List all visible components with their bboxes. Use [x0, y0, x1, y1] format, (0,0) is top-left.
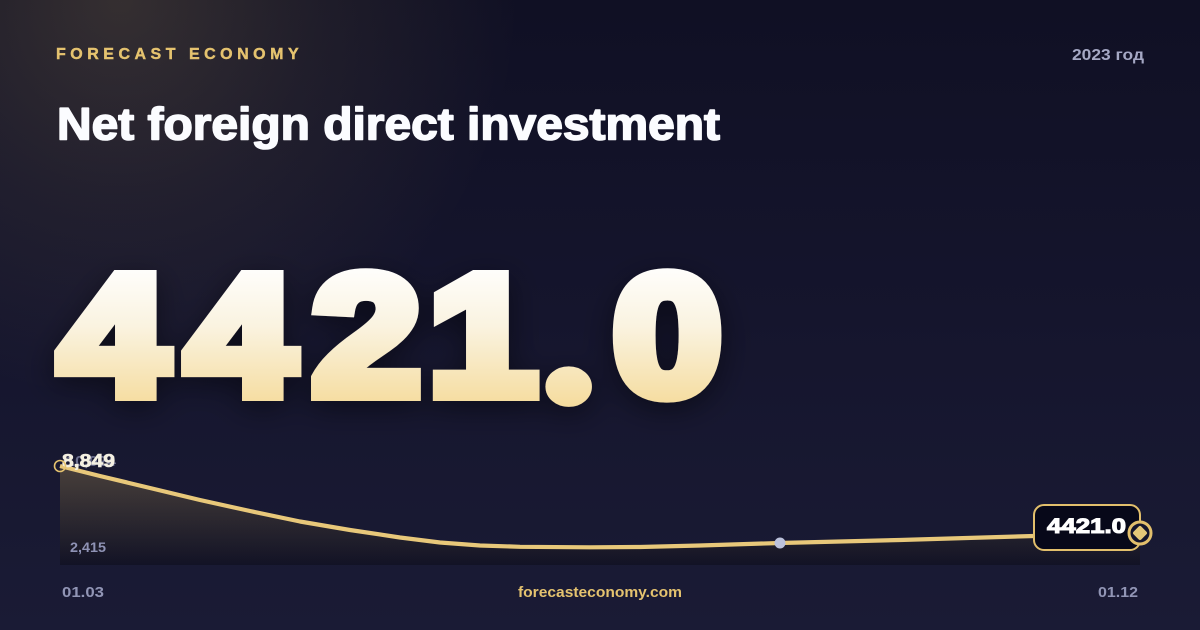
- chart line: [60, 466, 1140, 547]
- line chart: [54, 451, 1151, 565]
- main value: 0: [613, 240, 721, 430]
- end point marker: [1129, 522, 1151, 544]
- min value label: 2,415: [70, 539, 106, 555]
- main value: 4: [59, 240, 167, 430]
- end date label: 01.12: [1098, 584, 1138, 601]
- main value: .: [544, 246, 593, 435]
- start point marker: [54, 460, 66, 472]
- main value: 1: [429, 240, 537, 430]
- site url: forecasteconomy.com: [518, 585, 682, 601]
- brand label: FORECAST ECONOMY: [56, 46, 303, 63]
- main value: 2: [312, 240, 421, 430]
- max value label: 8,849: [62, 451, 115, 471]
- title: Net foreign direct investment: [57, 98, 720, 150]
- end value callout: 4421.0: [1047, 514, 1126, 538]
- overlapped max label: 10,024: [66, 453, 117, 470]
- mid point marker: [774, 538, 786, 548]
- start date label: 01.03: [62, 584, 104, 601]
- chart area fill: [60, 466, 1140, 565]
- year label: 2023 год: [1072, 47, 1144, 64]
- main value: 4: [186, 240, 294, 430]
- end value callout: [1034, 505, 1140, 550]
